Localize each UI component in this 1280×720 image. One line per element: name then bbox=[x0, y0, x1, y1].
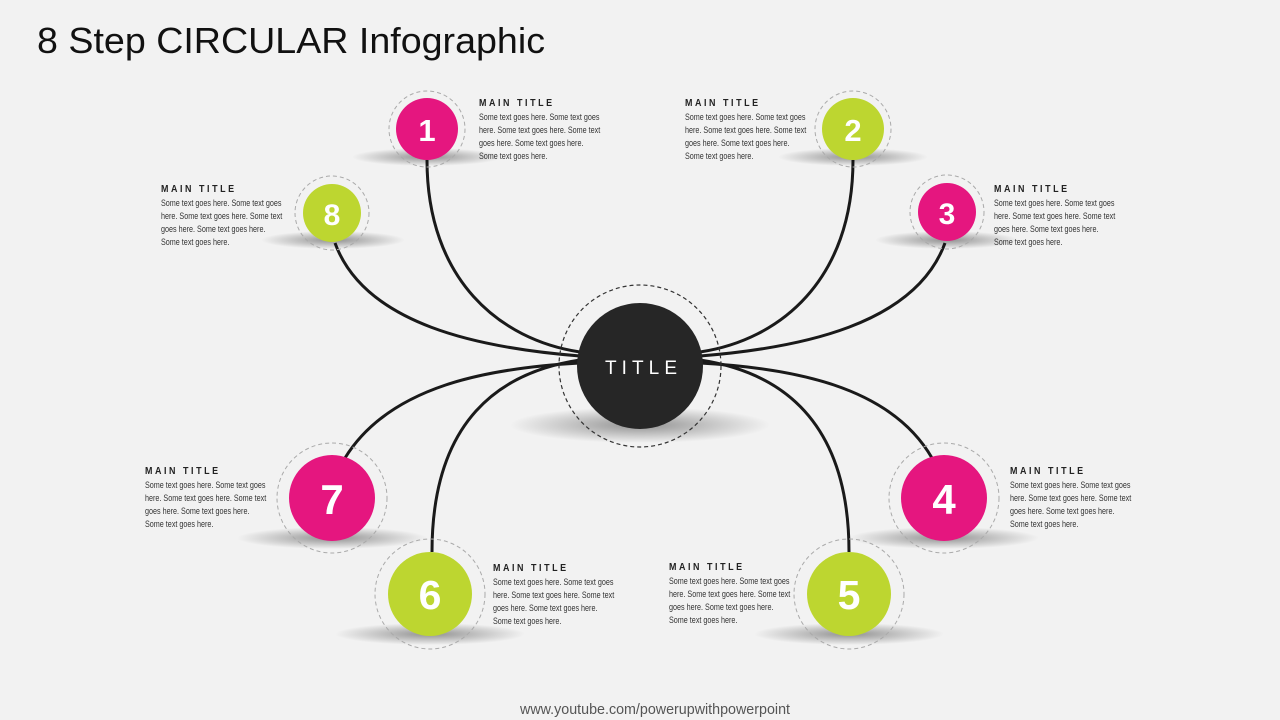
text block 5: Some text goes here. bbox=[669, 615, 737, 625]
text block 3: goes here. Some text goes here. bbox=[994, 224, 1098, 234]
node 7 bbox=[237, 443, 427, 553]
text block 8: MAIN TITLE bbox=[161, 183, 237, 195]
text block 3: Some text goes here. Some text goes bbox=[994, 198, 1114, 208]
text block 2: here. Some text goes here. Some text bbox=[685, 125, 806, 135]
text block 2 bbox=[685, 97, 806, 161]
node 2 bbox=[778, 91, 928, 167]
text block 1: MAIN TITLE bbox=[479, 97, 555, 109]
text block 4: MAIN TITLE bbox=[1010, 465, 1086, 477]
center node: TITLE bbox=[605, 358, 677, 379]
text block 6: goes here. Some text goes here. bbox=[493, 603, 597, 613]
node 3: 3 bbox=[939, 198, 955, 231]
text block 3: MAIN TITLE bbox=[994, 183, 1070, 195]
text block 4 bbox=[1010, 465, 1132, 529]
text block 7 bbox=[145, 465, 266, 529]
text block 8: here. Some text goes here. Some text bbox=[161, 211, 282, 221]
text block 4: here. Some text goes here. Some text bbox=[1010, 493, 1131, 503]
text block 2: MAIN TITLE bbox=[685, 97, 761, 109]
text block 8: Some text goes here. Some text goes bbox=[161, 198, 281, 208]
text block 4: Some text goes here. Some text goes bbox=[1010, 480, 1130, 490]
text block 7: goes here. Some text goes here. bbox=[145, 506, 249, 516]
node 8: 8 bbox=[324, 199, 340, 232]
text block 6: Some text goes here. Some text goes bbox=[493, 577, 613, 587]
text block 3: here. Some text goes here. Some text bbox=[994, 211, 1115, 221]
node 2: 2 bbox=[844, 113, 862, 148]
text block 6: Some text goes here. bbox=[493, 616, 561, 626]
connector lines bbox=[335, 160, 945, 552]
text block 2: goes here. Some text goes here. bbox=[685, 138, 789, 148]
node 7: 7 bbox=[320, 476, 344, 523]
text block 1: Some text goes here. Some text goes bbox=[479, 112, 599, 122]
text block 1: here. Some text goes here. Some text bbox=[479, 125, 600, 135]
node 3 bbox=[875, 175, 1019, 249]
text block 7: Some text goes here. bbox=[145, 519, 213, 529]
node 6: 6 bbox=[419, 572, 441, 618]
node 1: 1 bbox=[418, 113, 436, 148]
title: 8 Step CIRCULAR Infographic bbox=[37, 20, 545, 61]
center node bbox=[510, 285, 770, 447]
text block 1: goes here. Some text goes here. bbox=[479, 138, 583, 148]
text block 1: Some text goes here. bbox=[479, 151, 547, 161]
text block 5: goes here. Some text goes here. bbox=[669, 602, 773, 612]
text block 5: Some text goes here. Some text goes bbox=[669, 576, 789, 586]
text block 5: here. Some text goes here. Some text bbox=[669, 589, 790, 599]
text block 2: Some text goes here. Some text goes bbox=[685, 112, 805, 122]
text block 2: Some text goes here. bbox=[685, 151, 753, 161]
text block 8: goes here. Some text goes here. bbox=[161, 224, 265, 234]
node 6 bbox=[335, 539, 525, 649]
text block 1 bbox=[479, 97, 600, 161]
node 1 bbox=[352, 91, 502, 167]
text block 6: MAIN TITLE bbox=[493, 562, 569, 574]
footer url: www.youtube.com/powerupwithpowerpoint bbox=[519, 702, 790, 718]
text block 8 bbox=[161, 183, 282, 247]
text block 4: Some text goes here. bbox=[1010, 519, 1078, 529]
text block 4: goes here. Some text goes here. bbox=[1010, 506, 1114, 516]
text block 6 bbox=[493, 562, 614, 626]
node 5 bbox=[754, 539, 944, 649]
text block 5 bbox=[669, 561, 790, 625]
text block 7: Some text goes here. Some text goes bbox=[145, 480, 265, 490]
text block 7: MAIN TITLE bbox=[145, 465, 221, 477]
text block 3: Some text goes here. bbox=[994, 237, 1062, 247]
text block 7: here. Some text goes here. Some text bbox=[145, 493, 266, 503]
text block 8: Some text goes here. bbox=[161, 237, 229, 247]
node 8 bbox=[261, 176, 405, 250]
text block 5: MAIN TITLE bbox=[669, 561, 745, 573]
node 4: 4 bbox=[932, 476, 956, 523]
node 5: 5 bbox=[838, 572, 860, 618]
text block 6: here. Some text goes here. Some text bbox=[493, 590, 614, 600]
text block 3 bbox=[994, 183, 1116, 247]
node 4 bbox=[849, 443, 1039, 553]
